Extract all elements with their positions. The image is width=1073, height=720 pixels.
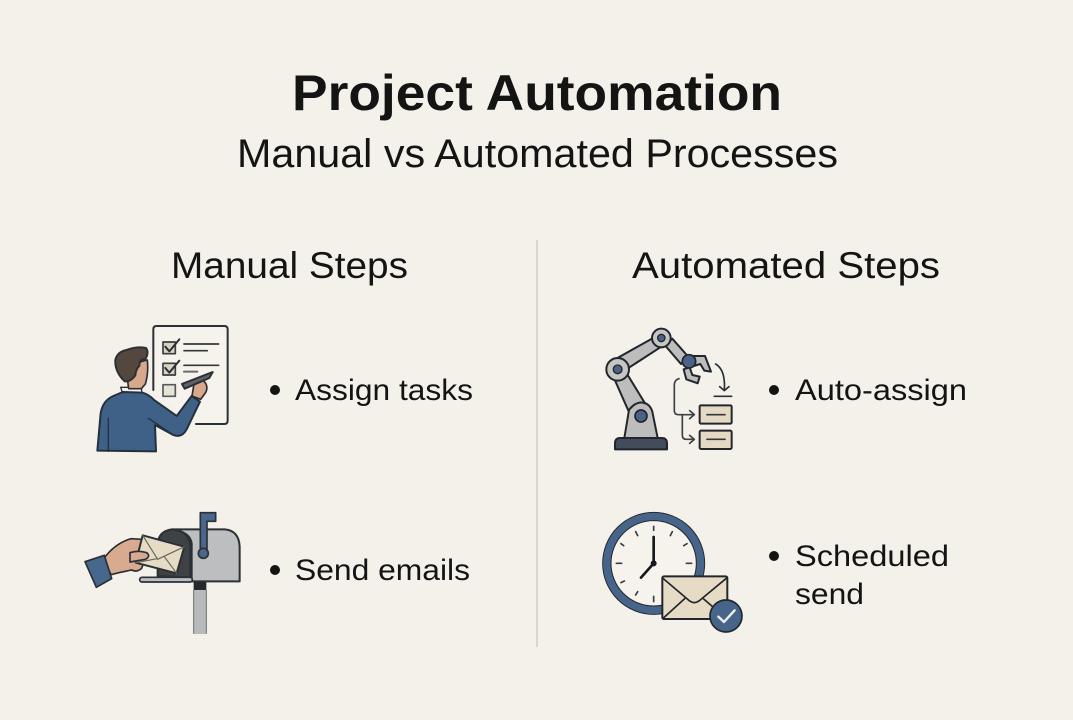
label: send emails: Send emails [295, 554, 470, 587]
icon: hand posting letter in mailbox [85, 513, 240, 634]
heading: manual steps: Manual Steps [171, 245, 408, 286]
label: scheduled send: send [795, 578, 864, 611]
label: scheduled send: Scheduled [795, 540, 949, 573]
icon: robot arm routing tasks [606, 329, 732, 449]
heading: automated steps: Automated Steps [632, 245, 940, 286]
bullet: send emails [270, 565, 280, 575]
bullet: auto-assign [769, 385, 779, 395]
bullet: scheduled send [769, 551, 779, 561]
subtitle: Manual vs Automated Processes [237, 132, 838, 176]
label: auto-assign: Auto-assign [795, 374, 967, 407]
title: Project Automation [292, 65, 782, 121]
label: scheduled send [795, 540, 949, 611]
label: assign tasks: Assign tasks [295, 374, 473, 407]
bullet: assign tasks [270, 385, 280, 395]
icon: clock with envelope and check [603, 512, 742, 632]
icon: person ticking checklist [97, 326, 228, 451]
